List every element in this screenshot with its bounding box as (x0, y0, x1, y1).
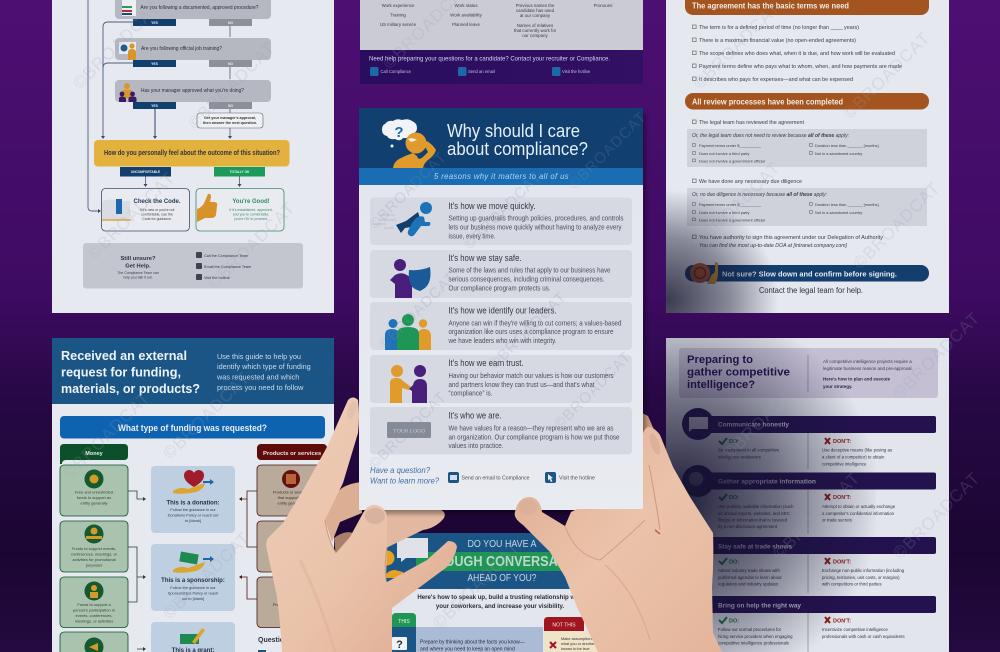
watermarks: ©BROADCAT (889, 468, 984, 563)
card: donation: This is a donation: (166, 500, 220, 506)
watermarks: ©BROADCAT (59, 388, 154, 483)
section: bring on help: Bring on help the right way (718, 602, 801, 610)
column: products or services: Products or services (273, 602, 309, 607)
section: bring on help: competitive intelligence professionals (718, 640, 789, 646)
section: gather information: by a non-disclosure agreement (718, 524, 778, 529)
panel: candidate questions (top center): Work availability (450, 12, 483, 18)
question bar (60, 416, 325, 438)
column: this: ? (396, 639, 403, 651)
panel: candidate questions (top center): Work experience (382, 3, 415, 8)
intro text (417, 594, 583, 610)
banner: slow down: Not sure? Slow down and confirm before signing. (722, 270, 897, 278)
checklist: legal review: The legal team has reviewed the agreement (699, 120, 804, 126)
footer contact links (370, 67, 591, 76)
checklist: due diligence: Not in a sanctioned country (815, 210, 862, 215)
flow step: documented procedure: NO (228, 21, 233, 25)
watermarks: ©BROADCAT (159, 528, 254, 623)
question bar: What type of funding was requested? (118, 423, 267, 433)
flow step: job training: YES (151, 62, 159, 66)
main card: why care about compliance: ©BROADCAT (486, 288, 570, 373)
heading: review processes (685, 93, 929, 110)
column: not this: Make assumptions (561, 636, 593, 641)
checklist: basic terms: Payment terms define who pays what to whom, when, and how payments are made (699, 64, 902, 70)
outcome: check the code (102, 188, 190, 231)
section: trade shows: published agendas to learn about (718, 575, 782, 580)
section: bring on help: DON'T: (833, 618, 851, 624)
card: sponsorship: Follow the guidance in our (170, 585, 216, 590)
checklist: basic terms: It describes who pays for expenses—and what can be expensed (699, 77, 853, 83)
card: donation (151, 466, 235, 533)
card: sponsorship: Sponsorships Policy or reach (168, 590, 218, 596)
header box: intelligence? (687, 379, 755, 391)
checklist: signing authority (692, 235, 883, 249)
panel: tough conversation (bottom center) (360, 533, 643, 652)
section: trade shows: pricing, territories, unit costs, or margins) (822, 575, 900, 580)
column: products or services (239, 444, 327, 652)
section: gather information: Attempt to obtain or actually exchange (822, 504, 896, 509)
contact note: Contact the legal team for help. (759, 286, 863, 295)
flow step: job training: Are you following official job training? (141, 46, 222, 52)
checklist: due diligence: Does not involve a third party (699, 210, 749, 215)
decision bar: personal feeling: UNCOMFORTABLE (131, 170, 160, 174)
decision bar: personal feeling (94, 140, 290, 176)
card footer: question: Have a question? (370, 465, 430, 475)
column: products or services: for promotion (279, 613, 303, 618)
card: donation: Donations Policy or reach out (168, 512, 219, 518)
outcome: you're good (196, 188, 284, 231)
section: trade shows: DON'T: (833, 560, 851, 566)
panel: candidate questions (top center): Names of relatives (517, 23, 554, 28)
panel: candidate questions (top center): Planned leave (452, 22, 480, 27)
reason 3: identify leaders: we have leaders who win with integrity. (448, 336, 556, 345)
card header (359, 108, 643, 168)
main card: why care about compliance: ©BROADCAT (376, 268, 460, 353)
section: gather information: DO: (729, 495, 739, 501)
header box: Here's how to plan and execute (823, 376, 891, 382)
reason 1: move quickly: It's how we move quickly. (448, 201, 536, 211)
intro text: Here's how to speak up, build a trusting relationship with (417, 594, 583, 601)
section: communicate honestly: Communicate honestly (718, 422, 789, 428)
section: gather information: or trade secrets (822, 518, 852, 522)
icon: thinking person: ? (394, 124, 404, 141)
reason 1: move quickly: issue, every time. (448, 232, 496, 240)
main card: why care about compliance: ©BROADCAT (366, 148, 450, 233)
watermarks: ©BROADCAT (689, 158, 784, 253)
main card: why care about compliance: ©BROADCAT (366, 388, 450, 473)
reason 2: stay safe (370, 250, 632, 298)
card: sponsorship (151, 544, 235, 611)
reason 1: move quickly: lets our business move quickly without having to analyze every (448, 222, 622, 232)
hand: left, back fingers (325, 482, 445, 561)
checklist: legal review: Payment terms under $__________ (699, 143, 762, 148)
checklist: due diligence (687, 179, 927, 226)
checklist: signing authority: You have authority to sign this agreement under our Delegation of Authority (699, 235, 883, 241)
column: products or services: that support an (278, 495, 304, 500)
header box: gather competitive (687, 366, 790, 378)
header band: AHEAD OF YOU? (468, 573, 537, 584)
panel: candidate questions (top center): Training (390, 12, 406, 18)
help box: still unsure (83, 243, 303, 288)
section: trade shows: regulatory and industry updates (718, 582, 778, 586)
checklist: basic terms: The scope defines who does what, when it is due, and how work will be evaluated (699, 51, 895, 57)
watermarks: ©BROADCAT (769, 468, 864, 563)
header band: TOUGH CONVERSATION (437, 553, 587, 570)
column: money: Funds to support a (77, 602, 111, 607)
section: communicate honestly: a client of a competitor) to obtain (822, 454, 885, 460)
column: this (392, 613, 543, 652)
checklist: signing authority: You can find the most up-to-date DOA at [intranet.company.com] (699, 243, 848, 249)
card: donation: Follow the guidance in our (170, 507, 216, 512)
outcome: you're good: you're OK to proceed. (234, 217, 268, 221)
section: communicate honestly: DON'T: (833, 439, 851, 445)
checklist: legal review: Not in a sanctioned country (815, 151, 862, 156)
section: gather information (682, 465, 936, 534)
outcome: you're good: You're Good! (232, 199, 270, 205)
reason 1: move quickly: Setting up guardrails through policies, procedures, and controls (448, 214, 624, 222)
checklist: due diligence: Duration less than _______ [months] (815, 202, 879, 207)
section: trade shows (700, 537, 936, 593)
checklist: legal review: Or, the legal team does not need to review because all of these apply: (692, 133, 850, 139)
hand: right, index fingertip behind card (640, 412, 655, 436)
section: gather information: Use publicly available information (such (718, 504, 794, 509)
header band: Use this guide to help you (217, 352, 301, 361)
section: gather information: as annual reports, websites, and SEC (718, 511, 790, 516)
card footer: email link (448, 472, 530, 483)
help box: still unsure: Still unsure? (120, 256, 156, 262)
header box: legitimate business reason and pre-approval. (823, 366, 913, 371)
footer contact links: Visit the hotline (562, 69, 591, 74)
panel: agreement checklist (top right) (666, 0, 949, 313)
watermarks: ©BROADCAT (719, 368, 814, 463)
column: money: Money (85, 451, 104, 457)
panel: candidate questions (top center): our company (522, 33, 548, 38)
flow step: job training: NO (228, 62, 233, 66)
outcome: check the code: Check the Code. (133, 199, 181, 205)
help box: still unsure: Call the Compliance Team (204, 254, 248, 258)
main card: why care about compliance: ©BROADCAT (551, 348, 635, 433)
reason 5: who we are (370, 407, 632, 454)
reason 3: identify leaders: It's how we identify our leaders. (448, 306, 556, 316)
outcome: check the code: comfortable, use the (141, 212, 173, 216)
section: gather information: Gather appropriate information (718, 478, 816, 486)
panel: candidate questions (top center): Previous names the (516, 3, 555, 8)
panel: competitive intelligence (bottom right) (666, 338, 949, 652)
section: trade shows: DO: (729, 560, 739, 566)
header band: DO YOU HAVE A (468, 539, 537, 550)
help box: still unsure: Get Help. (125, 264, 151, 270)
footer prompt: Need help preparing your questions for a candidate? Contact your recruiter or Compliance. (369, 56, 610, 62)
reason 4: earn trust: It's how we earn trust. (448, 358, 524, 368)
card footer: question: Want to learn more? (370, 476, 439, 486)
checklist: basic terms: There is a maximum financial value (no open-ended agreements) (699, 38, 856, 44)
logo placeholder (387, 422, 431, 438)
section: bring on help: DO: (729, 618, 739, 624)
flow arrows (88, 0, 242, 213)
reason 2: stay safe: Our compliance program protects us. (448, 284, 550, 292)
help box: still unsure: Email the Compliance Team (204, 265, 251, 269)
heading: basic terms: The agreement has the basic terms we need (692, 2, 849, 10)
flow step: manager approval: NO (228, 104, 233, 108)
banner: slow down (685, 265, 929, 282)
checklist: legal review (687, 120, 927, 167)
reason 2: stay safe: Some of the laws and rules that apply to our business have (448, 266, 610, 274)
heading: basic terms (685, 0, 929, 15)
icon: handshake (390, 365, 427, 403)
decision bar: personal feeling: How do you personally feel about the outcome of this situation? (104, 150, 280, 157)
outcome: check the code: If it's new or you're not (140, 208, 174, 212)
section: gather information: filings) or information that is covered (718, 518, 788, 522)
section: communicate honestly (682, 408, 936, 469)
section: communicate honestly: intelligence endeavors (718, 454, 761, 460)
subtitle band: 5 reasons why it matters to all of us (434, 172, 569, 181)
main card: why care about compliance (359, 108, 650, 514)
column: products or services: Products or services (263, 451, 322, 457)
column: products or services: Questions? (258, 637, 297, 644)
watermarks: ©BROADCAT (839, 28, 934, 123)
flow step: manager approval: YES (151, 104, 159, 108)
reason 4: earn trust: “compliance” is. (448, 388, 492, 398)
card header: Why should I care (447, 121, 580, 141)
hand: left (266, 398, 457, 652)
header band: identify which type of funding (217, 362, 311, 371)
decision bar: personal feeling: TOTALLY OK (230, 170, 250, 174)
checklist: due diligence: Or, no due diligence is necessary because all of these apply: (692, 192, 828, 198)
section: trade shows: Attend industry trade shows with (718, 568, 780, 573)
column: money (60, 444, 128, 652)
column: money: conferences, meetings, or (71, 552, 118, 556)
panel: candidate questions (top center): Work status (454, 3, 478, 8)
checklist: due diligence: We have done any necessary due diligence (699, 179, 802, 185)
column: not this (544, 617, 607, 652)
panel: candidate questions (top center): Pronouns (594, 3, 613, 8)
icon: three people (385, 314, 431, 350)
checklist: legal review: Does not involve a government official (699, 158, 765, 164)
icon: thinking person (382, 119, 436, 168)
column: products or services: to a person (281, 608, 301, 612)
header box: your strategy. (823, 384, 852, 389)
watermarks: ©BROADCAT (889, 308, 984, 403)
checklist: legal review: Does not involve a third party (699, 151, 749, 156)
header band: process you need to follow (217, 383, 304, 392)
flow step: manager approval (115, 80, 271, 109)
flow step: documented procedure (115, 0, 271, 26)
reason 2: stay safe: serious consequences, including criminal consequences. (448, 274, 604, 284)
panel: candidate questions (top center): candidate has used (516, 8, 555, 13)
watermarks: ©BROADCAT (689, 0, 784, 93)
watermarks: ©BROADCAT (429, 538, 524, 633)
section: communicate honestly: Use deceptive means (like posing as (822, 448, 892, 452)
main card: why care about compliance: ©BROADCAT (461, 168, 545, 253)
checklist: legal review: Duration less than _______ [months] (815, 143, 879, 148)
heading: review processes: All review processes have been completed (692, 98, 843, 106)
reason 4: earn trust: and partners know they can trust us—and that's what (448, 380, 594, 389)
column: money: purposes (86, 562, 102, 568)
reason 5: who we are: an organization. Our compliance program is how we put those (448, 432, 620, 442)
section: communicate honestly: Be transparent in all competitive (718, 448, 780, 452)
section: communicate honestly: competitive intelligence (822, 462, 867, 466)
section: trade shows: Exchange non-public information (including (822, 568, 905, 573)
reason 3: identify leaders (370, 302, 632, 350)
section: trade shows: Stay safe at trade shows (718, 544, 792, 550)
flow step: documented procedure: YES (151, 21, 159, 25)
watermarks: ©BROADCAT (204, 198, 299, 293)
logo placeholder: YOUR LOGO (393, 428, 425, 434)
card: sponsorship: out to [blank] (182, 596, 204, 601)
watermarks: ©BROADCAT (849, 178, 944, 273)
panel: candidate questions (top center) (360, 0, 643, 84)
section: gather information: DON'T: (833, 495, 851, 501)
header band (52, 338, 334, 404)
section: bring on help: hiring service providers when engaging (718, 634, 793, 639)
panel: candidate questions (top center): that currently work for (514, 28, 557, 33)
column: products or services: Products or services (273, 490, 309, 494)
column: not this: NOT THIS (552, 622, 576, 628)
card footer: hotline link (545, 472, 595, 483)
checklist: basic terms: The term is for a defined period of time (no longer than ____ years) (699, 25, 859, 31)
card: donation: to [blank] (185, 518, 201, 523)
checklist: basic terms (692, 25, 902, 83)
reason 5: who we are: It's who we are. (448, 410, 502, 420)
reason 5: who we are: values into practice. (448, 441, 504, 450)
column: money: Funds to support events, (72, 546, 116, 551)
help box: still unsure: Visit the hotline (204, 276, 230, 280)
watermarks: ©BROADCAT (69, 0, 164, 93)
outcome: check the code: Code for guidance. (142, 217, 172, 221)
watermarks: ©BROADCAT (184, 38, 279, 133)
panel: flowchart (top left) (52, 0, 334, 313)
intro text: your coworkers, and increase your visibility. (436, 603, 564, 610)
footer contact links: Send an email (468, 69, 495, 74)
header box: Preparing to (687, 354, 753, 366)
section: bring on help: Follow our normal procedures for (718, 627, 782, 632)
header box: All competitive intelligence projects require a (823, 359, 912, 364)
icon: person with shield (390, 259, 430, 298)
flow step: manager approval: Has your manager approved what you're doing? (141, 88, 244, 94)
column: not this: what you or another (561, 641, 596, 646)
panel: candidate questions (top center): at our company (520, 13, 551, 18)
header band: request for funding, (61, 366, 181, 380)
card: sponsorship: This is a sponsorship: (161, 578, 225, 584)
section: trade shows: with competitors or third parties (822, 582, 882, 586)
column: money: events, conferences, (76, 613, 112, 618)
subtitle band (359, 168, 643, 185)
column: money: Free and unrestricted (75, 490, 113, 494)
flow step: documented procedure: Are you following a documented, approved procedure? (140, 5, 258, 11)
header band: materials, or products? (61, 382, 200, 396)
icon: flying hero (373, 202, 432, 236)
reason 4: earn trust: Having our behavior match our values is how our customers (448, 371, 614, 380)
reason 4: earn trust (370, 355, 632, 403)
section: gather information: a competitor's confidential information (822, 511, 895, 516)
reason 3: identify leaders: organization like ours uses a compliance program to ensure (448, 327, 614, 336)
reason 3: identify leaders: Anyone can win if they're willing to cut corners; a values-based (448, 318, 622, 328)
column: money: entity generally (81, 500, 107, 506)
checklist: due diligence: Does not involve a government official (699, 218, 765, 222)
footer contact links: Call Compliance (380, 69, 412, 74)
section: bring on help: Incentivize competitive intelligence (822, 627, 889, 632)
watermarks: ©BROADCAT (84, 168, 179, 263)
checklist: due diligence: Payment terms under $__________ (699, 202, 762, 207)
card footer: question (370, 465, 439, 486)
help box: still unsure: The Compliance Team can (117, 271, 159, 275)
section: communicate honestly: DO: (729, 439, 739, 445)
callout: get manager approval: Get your manager's approval, (204, 116, 256, 120)
reason 2: stay safe: It's how we stay safe. (448, 253, 522, 263)
hand: right (515, 427, 722, 652)
callout: get manager approval: then answer the next question. (203, 121, 257, 125)
card footer: email link: Send an email to Compliance (462, 476, 530, 482)
reason 1: move quickly (370, 198, 632, 245)
column: money: person's participation in (73, 608, 115, 612)
callout: get manager approval (197, 113, 263, 128)
header band: Received an external (61, 349, 187, 363)
column: this: THIS (398, 619, 410, 625)
panel: candidate questions (top center): US military service (380, 22, 417, 27)
header band (360, 533, 643, 589)
card footer: hotline link: Visit the hotline (559, 476, 595, 482)
header band: was requested and which (216, 372, 299, 382)
column: money: meetings, or activities (75, 618, 113, 624)
outcome: you're good: If it's established, approved, (229, 208, 273, 212)
outcome: you're good: and you're comfortable, (233, 212, 269, 216)
column: this: Prepare by thinking about the facts you know— (420, 640, 525, 646)
main card: why care about compliance: ©BROADCAT (566, 108, 650, 193)
icon: snail (690, 262, 718, 284)
section: bring on help: professionals with cash or cash equivalents (822, 634, 905, 639)
card header: about compliance? (447, 139, 588, 159)
help box: still unsure: help you talk it out. (123, 276, 153, 280)
column: not this: knows to be true (561, 646, 590, 651)
section: bring on help (700, 596, 936, 652)
flow step: job training (115, 38, 271, 67)
column: money: activities for promotional (72, 557, 116, 562)
card: grant (151, 622, 235, 652)
watermarks: ©BROADCAT (159, 368, 254, 463)
reason 5: who we are: We have values for a reason—they represent who we are as (448, 424, 614, 432)
panel: funding request guide (bottom left) (52, 338, 334, 652)
connectors: money to guidance (128, 491, 146, 651)
column: money: funds to support an (77, 495, 111, 500)
column: products or services: entity generally (278, 500, 304, 506)
header box (679, 348, 938, 398)
